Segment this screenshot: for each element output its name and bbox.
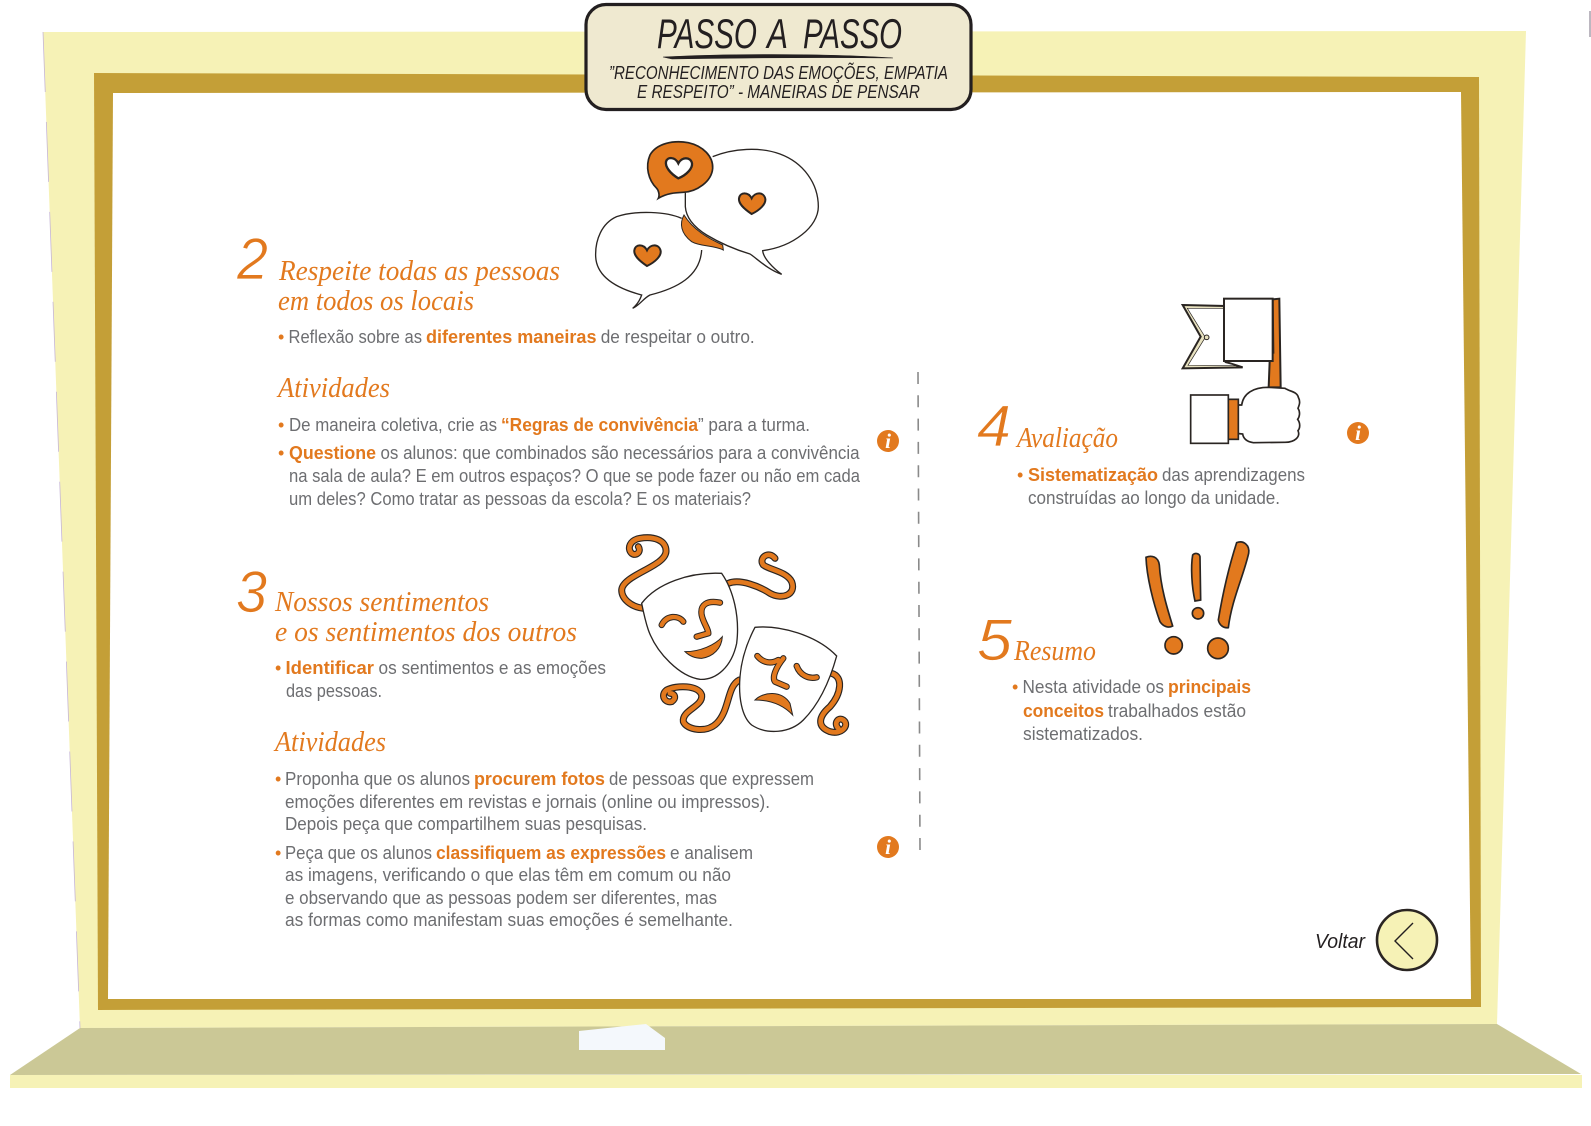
title xyxy=(657,10,902,57)
text: section 3 activities: • xyxy=(275,769,281,789)
title banner xyxy=(586,4,971,110)
text: section 3 activities: de pessoas que expressem xyxy=(609,769,814,789)
text: section 2 objective: diferentes maneiras xyxy=(426,327,596,347)
text: section 2 objective: de respeitar o outro. xyxy=(601,327,755,347)
subtitle xyxy=(609,62,948,102)
text: section 5: principais xyxy=(1168,677,1251,697)
panel: section 2 xyxy=(236,227,899,509)
text: section 2 activities xyxy=(278,415,861,509)
text: section 4: construídas ao longo da unidade. xyxy=(1028,488,1280,508)
title underline brush xyxy=(663,54,893,59)
title: PASSO xyxy=(803,10,902,57)
text: section 2 objective xyxy=(278,327,755,347)
text: section 2 activities: um deles? Como tratar as pessoas da escola? E os materiais? xyxy=(289,489,751,509)
text: section 4: das aprendizagens xyxy=(1162,465,1305,485)
icon: info xyxy=(1347,421,1369,445)
text: section 3 objective xyxy=(275,658,606,701)
text: section 2 activities: ” para a turma. xyxy=(698,415,810,435)
label: voltar: Voltar xyxy=(1315,931,1366,953)
text: section 3 activities: e analisem xyxy=(670,843,753,863)
title: A xyxy=(765,10,788,57)
text: section 2 activities: De maneira coletiva, crie as xyxy=(289,415,497,435)
text: section 2 activities: Questione xyxy=(289,443,376,463)
text: section 3 activities: Depois peça que compartilhem suas pesquisas. xyxy=(285,814,647,834)
text: section 3 activities: classifiquem as expressões xyxy=(436,843,666,863)
icon: hand holding flag xyxy=(1183,299,1300,443)
icon: info xyxy=(877,429,899,453)
text: section 3 activities: • xyxy=(275,843,281,863)
icon: exclamation marks xyxy=(1146,542,1249,659)
heading: section 2: Respeite todas as pessoas xyxy=(278,256,560,287)
subtitle: E RESPEITO” - MANEIRAS DE PENSAR xyxy=(637,82,920,102)
text: section 2 activities: • xyxy=(278,443,284,463)
panel: chalk shelf xyxy=(10,1024,1582,1088)
text: section 5: trabalhados estão xyxy=(1108,701,1246,721)
text: section 3 activities: as imagens, verificando o que elas têm em comum ou não xyxy=(285,865,731,885)
text: section 2 activities: • xyxy=(278,415,284,435)
panel: section 5 xyxy=(977,608,1251,744)
heading: section 2 xyxy=(278,256,560,317)
icon: chalk xyxy=(579,1024,665,1050)
text: section 5: sistematizados. xyxy=(1023,724,1143,744)
text: section 5: conceitos xyxy=(1023,701,1104,721)
text: section 2 activities: os alunos: que combinados são necessários para a convivência xyxy=(380,443,860,463)
icon: info xyxy=(877,835,899,859)
text: section 3 activities: as formas como manifestam suas emoções é semelhante. xyxy=(285,910,733,930)
panel: section 4 xyxy=(977,394,1369,508)
text: section 5 xyxy=(1012,677,1251,744)
heading: section 4: Avaliação xyxy=(1015,423,1118,454)
icon: theatre masks xyxy=(622,538,846,732)
text: section 4: Sistematização xyxy=(1028,465,1158,485)
text: section 2 activities: “Regras de convivência xyxy=(501,415,699,435)
icon: info: i xyxy=(885,835,891,859)
text: section 3 activities xyxy=(275,769,814,930)
text: section 4: • xyxy=(1017,465,1023,485)
back button xyxy=(1315,910,1437,970)
text: section 3 activities: Proponha que os alunos xyxy=(285,769,470,789)
panel: section 3 xyxy=(236,560,899,930)
title: PASSO xyxy=(657,10,757,57)
text: section 5: Nesta atividade os xyxy=(1022,677,1164,697)
text: section 2 objective: • xyxy=(278,327,284,347)
text: section 3 activities: procurem fotos xyxy=(474,769,605,789)
icon: info: i xyxy=(885,429,891,453)
step number 3: 3 xyxy=(236,560,267,625)
text: section 3 objective: • xyxy=(275,658,281,678)
subtitle: ”RECONHECIMENTO DAS EMOÇÕES, EMPATIA xyxy=(609,62,948,83)
icon: info: i xyxy=(1355,421,1361,445)
heading: section 3 xyxy=(274,587,577,648)
heading: section 3: Nossos sentimentos xyxy=(274,587,489,618)
text: section 3 objective: das pessoas. xyxy=(286,681,382,701)
step number 4: 4 xyxy=(977,394,1011,459)
step number 2: 2 xyxy=(236,227,268,292)
text: section 3 activities: e observando que as pessoas podem ser diferentes, mas xyxy=(285,888,717,908)
heading: atividades: Atividades xyxy=(276,373,390,404)
text: section 2 objective: Reflexão sobre as xyxy=(288,327,422,347)
heading: section 5: Resumo xyxy=(1013,636,1096,667)
text: section 3 activities: Peça que os alunos xyxy=(285,843,432,863)
text: section 3 activities: emoções diferentes em revistas e jornais (online ou impressos). xyxy=(285,792,770,812)
text: section 2 activities: na sala de aula? E em outros espaços? O que se pode fazer ou não em cada xyxy=(289,466,861,486)
text: section 3 objective: Identificar xyxy=(286,658,374,678)
icon: back arrow circle xyxy=(1377,910,1437,970)
heading: section 2: em todos os locais xyxy=(278,286,474,317)
text: section 3 objective: os sentimentos e as emoções xyxy=(378,658,606,678)
icon: speech bubbles with hearts xyxy=(596,142,818,308)
step number 5: 5 xyxy=(977,608,1013,673)
heading: section 3: e os sentimentos dos outros xyxy=(275,617,577,648)
text: section 5: • xyxy=(1012,677,1018,697)
heading: atividades: Atividades xyxy=(273,727,386,758)
text: section 4 xyxy=(1017,465,1305,508)
